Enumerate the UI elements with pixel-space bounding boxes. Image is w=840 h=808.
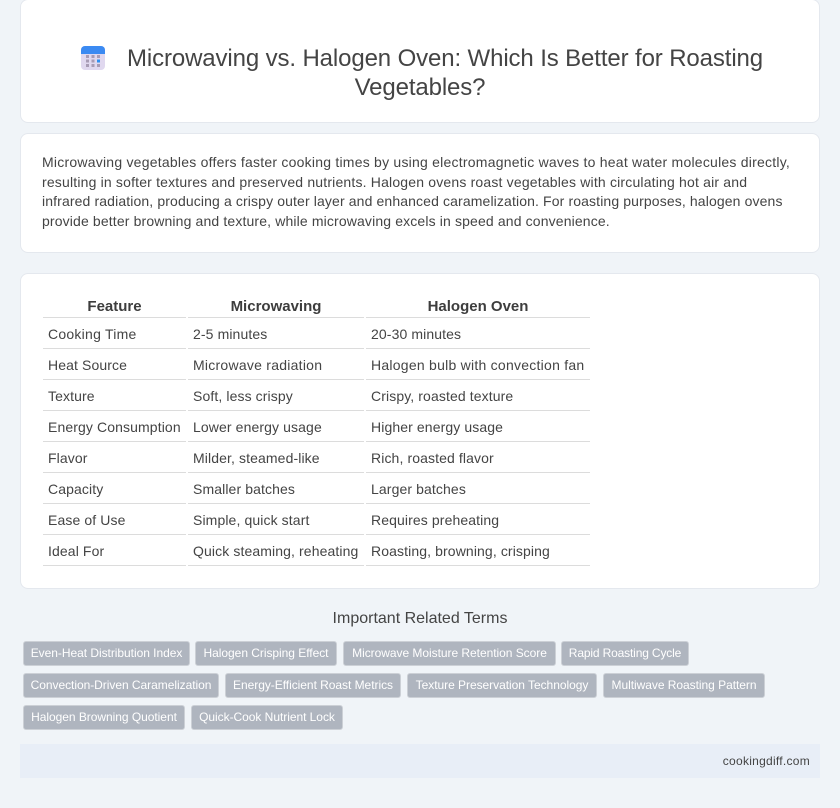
comparison table: Energy Consumption <box>48 419 181 435</box>
intro paragraph: resulting in softer textures and preserved nutrients. Halogen ovens roast vegetables with circulating hot air and <box>42 174 747 190</box>
title: Vegetables? <box>355 74 485 101</box>
comparison table panel <box>20 273 820 589</box>
comparison table: Roasting, browning, crisping <box>371 543 550 559</box>
comparison table: Simple, quick start <box>193 512 309 528</box>
related terms heading: Important Related Terms <box>333 610 507 627</box>
related terms tags: Convection-Driven Caramelization <box>31 678 211 692</box>
comparison table: Quick steaming, reheating <box>193 543 358 559</box>
comparison table: Requires preheating <box>371 512 499 528</box>
header panel <box>20 0 820 123</box>
related terms tags: Texture Preservation Technology <box>416 678 588 692</box>
related terms tags: Quick-Cook Nutrient Lock <box>199 710 335 724</box>
related terms tags: Energy-Efficient Roast Metrics <box>233 678 393 692</box>
related terms tags: Multiwave Roasting Pattern <box>611 678 757 692</box>
comparison table: Milder, steamed-like <box>193 450 320 466</box>
comparison table: Microwave radiation <box>193 357 322 373</box>
related terms tags: Even-Heat Distribution Index <box>31 646 182 660</box>
icon: calendar <box>81 46 105 70</box>
related terms tags: Rapid Roasting Cycle <box>569 646 681 660</box>
comparison table: Crispy, roasted texture <box>371 388 513 404</box>
comparison table: Smaller batches <box>193 481 295 497</box>
comparison table: Capacity <box>48 481 103 497</box>
related terms tags: Microwave Moisture Retention Score <box>352 646 547 660</box>
intro paragraph: Microwaving vegetables offers faster cooking times by using electromagnetic waves to heat water molecules directly, <box>42 154 790 170</box>
comparison table: Ideal For <box>48 543 104 559</box>
comparison table: Soft, less crispy <box>193 388 293 404</box>
comparison table: Heat Source <box>48 357 127 373</box>
related terms tags <box>23 641 765 730</box>
footer source: cookingdiff.com <box>723 754 810 768</box>
intro paragraph: provide better browning and texture, while microwaving excels in speed and convenience. <box>42 212 610 228</box>
comparison table: Halogen bulb with convection fan <box>371 357 584 373</box>
comparison table: Larger batches <box>371 481 466 497</box>
related terms tags: Halogen Crisping Effect <box>204 646 328 660</box>
intro paragraph <box>42 154 790 229</box>
intro paragraph: infrared radiation, producing a crispy outer layer and enhanced caramelization. For roasting purposes, halogen ovens <box>42 193 783 209</box>
intro text panel <box>20 133 820 253</box>
title: Microwaving vs. Halogen Oven: Which Is Better for Roasting <box>127 45 763 72</box>
title <box>127 45 763 101</box>
footer bar <box>20 744 820 778</box>
comparison table: Cooking Time <box>48 326 137 342</box>
comparison table: Lower energy usage <box>193 419 322 435</box>
comparison table: Feature <box>87 298 142 315</box>
comparison table: Ease of Use <box>48 512 125 528</box>
comparison table: Rich, roasted flavor <box>371 450 494 466</box>
comparison table: Microwaving <box>231 298 321 315</box>
comparison table: Texture <box>48 388 95 404</box>
comparison table: Higher energy usage <box>371 419 503 435</box>
comparison table: Halogen Oven <box>428 298 528 315</box>
comparison table: Flavor <box>48 450 88 466</box>
comparison table: 20-30 minutes <box>371 326 461 342</box>
related terms tags: Halogen Browning Quotient <box>31 710 177 724</box>
comparison table: 2-5 minutes <box>193 326 267 342</box>
